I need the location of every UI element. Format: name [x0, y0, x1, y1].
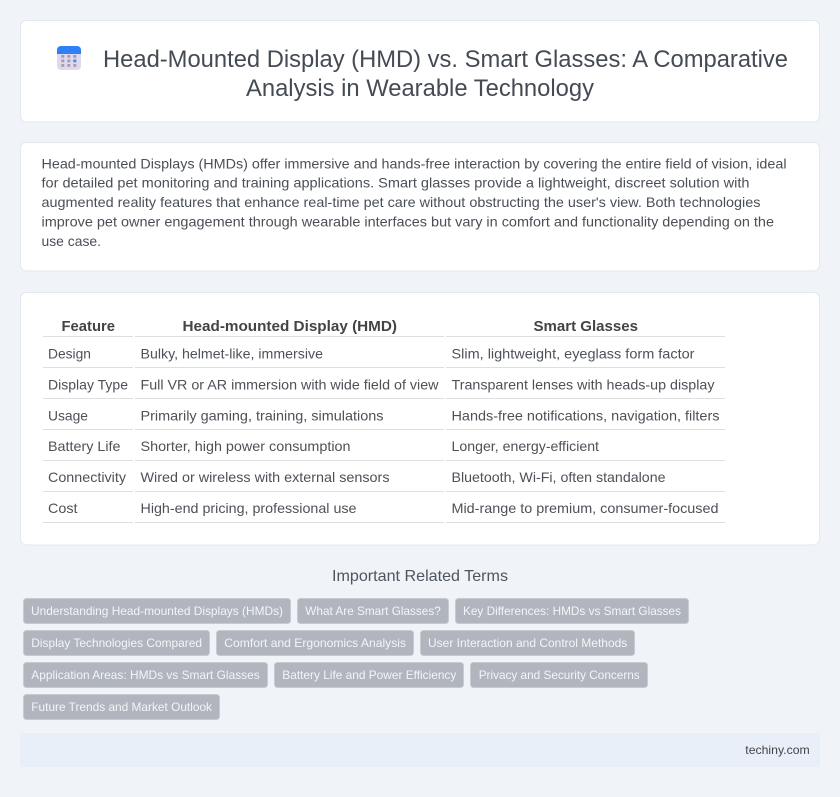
icon: calendar grid [57, 46, 81, 70]
panel: header [20, 20, 820, 122]
title: Analysis in Wearable Technology [246, 75, 594, 102]
footer bar [20, 733, 820, 767]
table row: design: Slim, lightweight, eyeglass form factor [452, 345, 695, 361]
tag: Battery Life and Power Efficiency [282, 668, 456, 682]
table row: connectivity: Bluetooth, Wi-Fi, often standalone [452, 469, 666, 485]
tag [420, 630, 634, 656]
table row: design: Design [48, 345, 91, 361]
tag [216, 630, 414, 656]
text block: summary paragraph: augmented reality features that enhance real-time pet care without obstructing the user's view. Both technologies [42, 194, 760, 210]
table row: usage: Hands-free notifications, navigation, filters [452, 407, 720, 423]
panel: related term tags [24, 598, 688, 720]
table row: connectivity: Wired or wireless with external sensors [140, 469, 390, 485]
table row: connectivity [48, 469, 666, 485]
panel: comparison table [20, 292, 820, 545]
table header row: Head-mounted Display (HMD) [182, 318, 397, 335]
table row: battery life: Longer, energy-efficient [452, 438, 599, 454]
tag: Privacy and Security Concerns [479, 668, 640, 682]
text block: summary paragraph: Head-mounted Displays (HMDs) offer immersive and hands-free interaction by covering the entire field of vision, ideal [42, 155, 786, 171]
table header row [62, 318, 638, 335]
tag: Comfort and Ergonomics Analysis [224, 636, 406, 650]
table row: connectivity: Connectivity [48, 469, 126, 485]
table row: battery life: Battery Life [48, 438, 121, 454]
table row: design [48, 345, 695, 361]
tag: User Interaction and Control Methods [428, 636, 627, 650]
title [103, 46, 788, 102]
panel: intro text [20, 142, 820, 271]
tag: Display Technologies Compared [31, 636, 202, 650]
footer source: techiny.com [745, 743, 810, 757]
table row: display type: Display Type [48, 376, 128, 392]
tag [24, 630, 210, 656]
table row: usage: Usage [48, 407, 88, 423]
table row: display type [48, 376, 714, 392]
table row: cost: Cost [48, 500, 78, 516]
tag [298, 598, 448, 624]
tag: Application Areas: HMDs vs Smart Glasses [31, 668, 260, 682]
tag [470, 662, 648, 688]
text block: summary paragraph: for detailed pet monitoring and training applications. Smart glasses provide a lightweight, discreet solution with [42, 174, 750, 190]
text block: summary paragraph: use case. [42, 233, 101, 249]
tag [24, 694, 220, 720]
heading: important related terms: Important Related Terms [332, 568, 508, 585]
tag: Key Differences: HMDs vs Smart Glasses [463, 604, 681, 618]
table row: design: Bulky, helmet-like, immersive [140, 345, 323, 361]
table row: cost: High-end pricing, professional use [140, 500, 357, 516]
table row: cost: Mid-range to premium, consumer-focused [452, 500, 718, 516]
table row: display type: Full VR or AR immersion with wide field of view [140, 376, 439, 392]
table header row: Feature [62, 318, 115, 335]
tag: Future Trends and Market Outlook [31, 700, 213, 714]
tag [24, 598, 290, 624]
tag [456, 598, 688, 624]
table row: cost [48, 500, 718, 516]
table row: usage [48, 407, 720, 423]
tag [24, 662, 268, 688]
table row: battery life [48, 438, 599, 454]
tag [274, 662, 464, 688]
text block: summary paragraph [42, 155, 786, 249]
title: Head-Mounted Display (HMD) vs. Smart Glasses: A Comparative [103, 46, 788, 73]
text block: summary paragraph: improve pet owner engagement through wearable interfaces but vary in comfort and functionality depending on the [42, 214, 774, 230]
tag: What Are Smart Glasses? [305, 604, 441, 618]
table header row: Smart Glasses [534, 318, 638, 335]
table row: battery life: Shorter, high power consumption [140, 438, 350, 454]
tag: Understanding Head-mounted Displays (HMDs) [31, 604, 283, 618]
table row: display type: Transparent lenses with heads-up display [452, 376, 714, 392]
table row: usage: Primarily gaming, training, simulations [140, 407, 384, 423]
